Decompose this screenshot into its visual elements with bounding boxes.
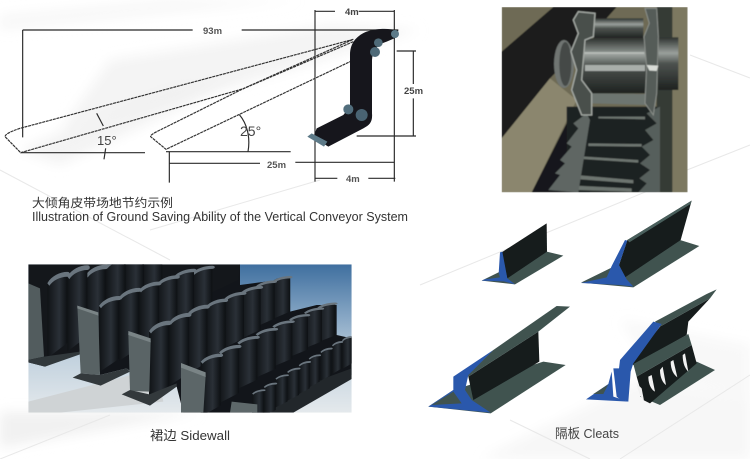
caption: diagram: 大倾角皮带场地节约示例 (32, 195, 173, 210)
diagram labels: 4m (346, 174, 360, 185)
cleat 1 (482, 223, 563, 284)
diagram labels: 25m (267, 160, 286, 171)
conveyor belt (307, 29, 399, 147)
wavy flanges (571, 12, 595, 115)
drum end hubs (554, 40, 574, 88)
diagram labels: 4m (345, 7, 359, 18)
belt sidewall teeth (548, 113, 590, 192)
sidewall row 2 (73, 266, 215, 386)
panel: cleats (428, 201, 717, 413)
dark backing between rows (98, 264, 352, 413)
caption: sidewall: 裙边 Sidewall (150, 428, 230, 443)
diagram labels: 25m (404, 86, 423, 97)
diagram labels: 25° (240, 123, 261, 139)
sidewall row 1 (28, 253, 240, 367)
panel: ground saving diagram (5, 10, 416, 183)
dimension lines (21, 10, 416, 183)
drum body (593, 18, 643, 38)
photo: sidewall belts (28, 264, 352, 413)
cleat 3 (428, 306, 570, 413)
caption: cleats: 隔板 Cleats (555, 426, 619, 441)
diagram labels (97, 7, 423, 185)
cleat 4 (586, 289, 717, 405)
cleat 2 (581, 201, 699, 287)
photo: sprocket drum on belt (502, 7, 688, 192)
diagram labels: 15° (97, 133, 117, 148)
caption: diagram: Illustration of Ground Saving Ability of the Vertical Conveyor System (32, 209, 408, 224)
sidewall row 4 (181, 303, 338, 417)
diagram labels: 93m (203, 26, 222, 37)
belt cleats (567, 107, 657, 192)
caption: diagram (32, 195, 408, 224)
belt outlines at 15 and 25 degrees (5, 39, 353, 153)
sidewall row 3 (122, 276, 293, 406)
sidewall row 5 (230, 336, 352, 413)
